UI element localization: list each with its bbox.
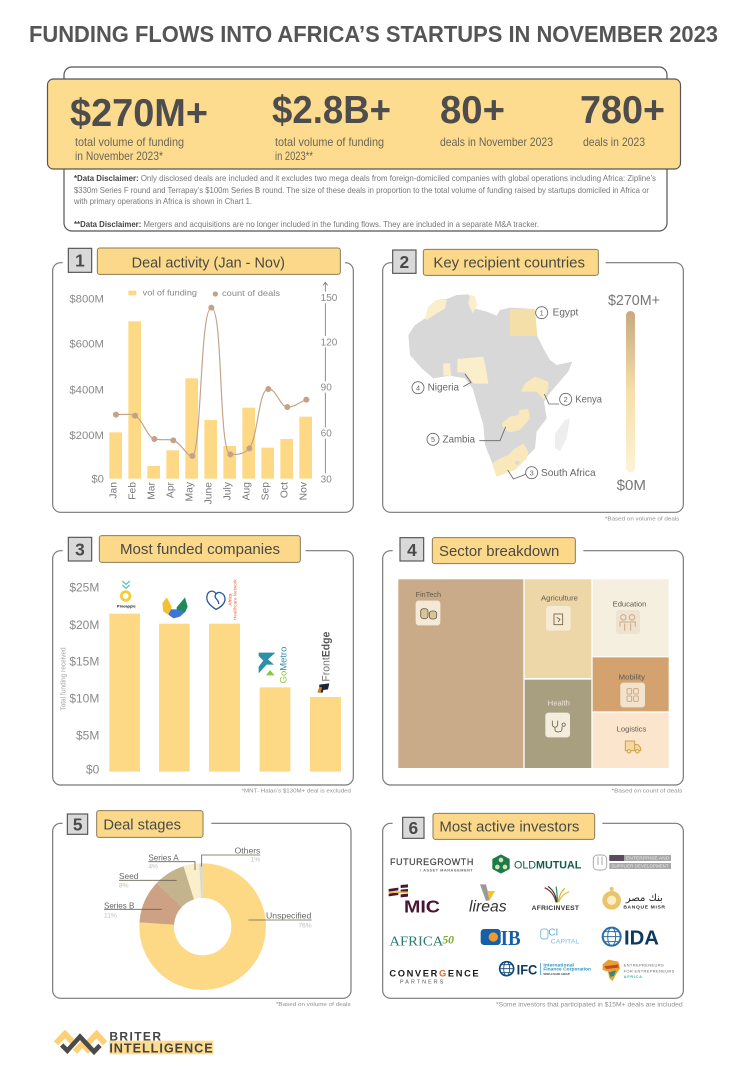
logo: Convergence Partners: PARTNERS [400, 979, 444, 985]
yellow stats banner: in November 2023* [75, 149, 163, 163]
callout: Unspecified [248, 910, 312, 930]
logo: Banque Misr: BANQUE MISR [623, 905, 665, 911]
logo: Futuregrowth [390, 857, 473, 873]
yellow stats banner: deals in 2023 [583, 135, 645, 149]
month labels: Nov [298, 481, 309, 500]
country label: South Africa [508, 467, 596, 479]
right axis: deal count: 150 [321, 293, 338, 304]
country label: South Africa: 3 [530, 468, 534, 477]
callout: Series A: 4% [148, 863, 158, 870]
panel 3: most funded companies [53, 536, 353, 795]
logo: IFC: International [543, 962, 574, 967]
footnote: *MNT- Halan’s $130M+ deal is excluded [242, 789, 351, 795]
callout: Series B: 11% [104, 912, 117, 919]
treemap cell: Health: Health [548, 701, 570, 708]
logo: Enterprise and Supplier Development: ENTERPRISE AND [626, 856, 669, 861]
logo: Old Mutual: OLDMUTUAL [514, 859, 582, 871]
logo: MIC [389, 884, 441, 916]
treemap cell: Health [525, 680, 591, 768]
panel number 4 [400, 538, 424, 561]
left axis: funding: $400M [69, 384, 104, 396]
logo: IFC [500, 961, 591, 977]
logo: three-colour bowl mark [162, 597, 188, 618]
disclaimer card [64, 67, 667, 231]
line chart: count of deals [113, 305, 309, 459]
logo: CIB [481, 928, 521, 950]
heading: deal stages [97, 811, 203, 837]
panel number 1: 1 [75, 250, 85, 270]
map of Africa [408, 294, 572, 477]
y axis: Total funding received [60, 647, 67, 711]
country label: Nigeria: 4 [416, 383, 420, 392]
country label: Egypt: 1 [540, 308, 544, 317]
footnote: *Some investors that participated in $15M+ deals are included [496, 1001, 683, 1008]
country label: South Africa: South Africa [541, 468, 596, 479]
treemap cell: Logistics [593, 713, 669, 768]
panel number 2 [393, 250, 416, 273]
logo: CIB: IB [501, 928, 521, 950]
logo: Pineapple: Pineapple [117, 604, 137, 609]
yellow stats banner: deals in November 2023 [440, 135, 553, 149]
yellow stats banner: 80+ [440, 89, 505, 132]
panel number 3: 3 [75, 540, 85, 560]
legend [128, 288, 281, 298]
legend: vol of funding [143, 288, 197, 298]
left axis: funding: $0 [91, 474, 104, 486]
panel number 5 [67, 814, 88, 834]
treemap cell: Education [593, 579, 669, 656]
right axis: deal count: 120 [321, 337, 338, 348]
heading: most active investors [433, 813, 595, 839]
donut chart [157, 881, 249, 973]
legend: count of deals [222, 288, 281, 298]
logo: Briter Intelligence: BRITER [109, 1029, 161, 1043]
treemap cell: Mobility: Mobility [619, 675, 646, 682]
logo: Entrepreneurs for Entrepreneurs Africa [603, 960, 675, 981]
logo: MIC: MIC [404, 896, 441, 916]
y axis: $25M [69, 580, 99, 594]
callout: Others [202, 846, 261, 867]
heading: sector breakdown: Sector breakdown [439, 543, 559, 560]
panel number 2: 2 [400, 252, 409, 272]
logo: CI Capital: CI [548, 928, 558, 939]
logo: Briter Intelligence [56, 1029, 213, 1056]
heading: deal activity: Deal activity (Jan - Nov) [132, 254, 285, 271]
logo: IDA [603, 926, 659, 949]
panel number 4: 4 [407, 540, 417, 560]
panel 1: deal activity [53, 248, 353, 512]
month labels: Feb [127, 482, 138, 500]
month labels: Sep [260, 482, 271, 500]
callout: Unspecified: Unspecified [266, 910, 312, 920]
yellow stats banner: total volume of funding [75, 135, 184, 149]
treemap cell: Agriculture [525, 579, 591, 678]
logo: Africa50: 50 [442, 932, 454, 946]
treemap cell: Mobility [593, 657, 669, 711]
month labels: Apr [165, 481, 176, 498]
yellow stats banner: 780+ [580, 89, 665, 132]
logo: Banque Misr: بنك مصر [625, 893, 663, 904]
logo: Pineapple [117, 581, 137, 609]
heading: deal stages: Deal stages [103, 816, 181, 833]
callout: Series B: Series B [104, 901, 135, 911]
country label: Kenya: 2 [564, 395, 568, 404]
month labels: May [184, 481, 195, 502]
logo: Enterprise and Supplier Development: SUPPLIER DEVELOPMENT [611, 864, 669, 869]
month labels: July [222, 481, 233, 500]
heading: most funded companies [99, 536, 300, 562]
left axis: funding: $600M [69, 338, 104, 350]
logo: Convergence Partners: CONVERGENCE [389, 969, 479, 979]
month labels: June [203, 482, 214, 504]
logo: AfricInvest: AFRICINVEST [532, 905, 579, 912]
logo: Entrepreneurs for Entrepreneurs Africa: ENTREPRENEURS [624, 963, 664, 968]
logo: Entrepreneurs for Entrepreneurs Africa: AFRICA [624, 974, 642, 979]
country label: Zambia [427, 427, 506, 446]
logo: IFC: WORLD BANK GROUP [543, 972, 570, 976]
panel number 3 [68, 537, 92, 561]
country label: Zambia: Zambia [443, 435, 476, 446]
country label: Nigeria: Nigeria [428, 383, 460, 394]
bar chart: volume of funding [109, 321, 312, 479]
y axis: $20M [69, 618, 99, 632]
logo: Banque Misr [602, 887, 665, 911]
logo: GoMetro: GoMetro [279, 647, 289, 683]
heading: deal activity [97, 248, 340, 274]
disclaimer card: *Data Disclaimer: Only disclosed deals are included and it excludes two mega deals from foreign-domiciled companies with global operations including Africa: Zipline’s [74, 173, 656, 183]
scale legend: $0M [617, 478, 646, 494]
treemap cell: Agriculture: Agriculture [541, 596, 578, 603]
heading: key recipient countries: Key recipient countries [433, 254, 585, 271]
title: FUNDING FLOWS INTO AFRICA’S STARTUPS IN NOVEMBER 2023 [29, 21, 718, 47]
month labels [108, 481, 309, 504]
logo: AfricInvest [532, 886, 579, 912]
heading: key recipient countries [423, 249, 598, 275]
treemap cell: Logistics: Logistics [617, 726, 647, 733]
month labels: Mar [146, 481, 157, 500]
callout: Series A [148, 852, 195, 870]
logo: Africa Healthcare Network [207, 578, 238, 620]
y axis: $0 [86, 763, 100, 777]
logo: Enterprise and Supplier Development [593, 855, 671, 870]
country label: Egypt: Egypt [553, 308, 579, 319]
yellow stats banner: $2.8B+ [272, 89, 391, 132]
logo: Lireas [469, 884, 507, 916]
callout: Seed: 8% [119, 883, 129, 890]
logo: IFC: IFC [517, 961, 537, 977]
yellow stats banner: total volume of funding [275, 135, 384, 149]
logo: Lireas: lireas [469, 899, 507, 916]
callout: Series A: Series A [148, 852, 179, 862]
logo: Africa50 [389, 932, 454, 950]
country label: Kenya [544, 393, 603, 406]
logo: FrontEdge: FrontEdge [320, 632, 332, 682]
left axis: funding: $800M [69, 293, 104, 305]
logo: Old Mutual [492, 854, 582, 874]
logo: CI Capital [541, 928, 580, 945]
yellow stats banner: $270M+ [70, 92, 208, 135]
callout: Series B [104, 901, 162, 919]
footnote: *Based on count of deals [612, 788, 683, 794]
left axis: funding: $200M [69, 430, 104, 442]
country label: Kenya: Kenya [575, 395, 603, 406]
panel 6: most active investors [383, 813, 683, 1008]
logo: IDA: IDA [624, 926, 659, 949]
right axis: deal count: 30 [321, 474, 332, 485]
panel number 6 [403, 817, 424, 838]
disclaimer card: with primary operations in Africa is shown in Chart 1. [73, 196, 252, 206]
y axis: $15M [69, 655, 99, 669]
heading: most active investors: Most active investors [439, 819, 579, 836]
right axis: deal count: 60 [321, 429, 332, 440]
logo: Africa50: AFRICA [389, 935, 443, 950]
panel number 5: 5 [73, 814, 83, 834]
panel 2: key recipient countries [383, 249, 683, 523]
month labels: Jan [108, 482, 119, 499]
footnote: *Based on volume of deals [605, 517, 680, 523]
logo: CI Capital: CAPITAL [551, 938, 580, 945]
country label: Nigeria [412, 374, 471, 394]
panel number 1 [68, 248, 92, 272]
scale legend: $270M+ [608, 293, 660, 309]
country label: Zambia: 5 [431, 435, 435, 444]
y axis [60, 580, 100, 777]
right axis: deal count: 90 [321, 383, 332, 394]
footnote: *Based on volume of deals [276, 1002, 351, 1008]
disclaimer card: $330m Series F round and Terrapay’s $100m Series B round. The size of these deals in proportion to the total volume of funding raised by startups domiciled in Africa or [74, 185, 649, 195]
logo: Briter Intelligence: INTELLIGENCE [109, 1042, 213, 1056]
month labels: Oct [279, 482, 290, 498]
heading: most funded companies: Most funded companies [120, 541, 280, 558]
y axis: $10M [69, 692, 99, 706]
country label: Egypt [536, 307, 579, 319]
logo: Africa Healthcare Network: Healthcare Network [233, 578, 238, 620]
logo: IFC: Finance Corporation [543, 967, 591, 972]
scale legend [608, 293, 660, 494]
panel 4: sector breakdown [383, 538, 683, 794]
month labels: Aug [241, 482, 252, 500]
disclaimer card: **Data Disclaimer: Mergers and acquisitions are no longer included in the funding flows. They are included in a separate M&A tracker. [74, 219, 539, 229]
right axis: deal count [321, 282, 338, 485]
logo: Convergence Partners [389, 969, 479, 985]
panel 5: deal stages [53, 811, 351, 1008]
yellow stats banner [48, 79, 680, 169]
callout: Seed: Seed [119, 871, 139, 881]
logo: Entrepreneurs for Entrepreneurs Africa: FOR ENTREPRENEURS [624, 968, 675, 973]
callout: Others: Others [235, 846, 261, 856]
panel: headline figures and disclaimers [48, 67, 680, 231]
heading: sector breakdown [432, 538, 575, 564]
callout: Seed [119, 871, 177, 890]
logo: Futuregrowth: / ASSET MANAGEMENT [420, 869, 473, 873]
logo: FrontEdge [317, 632, 332, 693]
bar chart: funding per company [109, 614, 341, 772]
callout: Unspecified: 76% [298, 923, 312, 930]
logo: Africa Healthcare Network: Africa [228, 593, 233, 606]
treemap cell: FinTech [398, 579, 523, 768]
callout: Others: 1% [251, 857, 260, 864]
treemap cell: Education: Education [613, 602, 646, 609]
y axis: $5M [76, 728, 99, 742]
panel number 6: 6 [409, 818, 419, 838]
logo: GoMetro [259, 647, 289, 683]
left axis: funding [69, 293, 104, 486]
yellow stats banner: in 2023** [275, 149, 313, 163]
treemap cell: FinTech: FinTech [416, 592, 441, 599]
logo: Futuregrowth: FUTUREGROWTH [390, 857, 473, 867]
